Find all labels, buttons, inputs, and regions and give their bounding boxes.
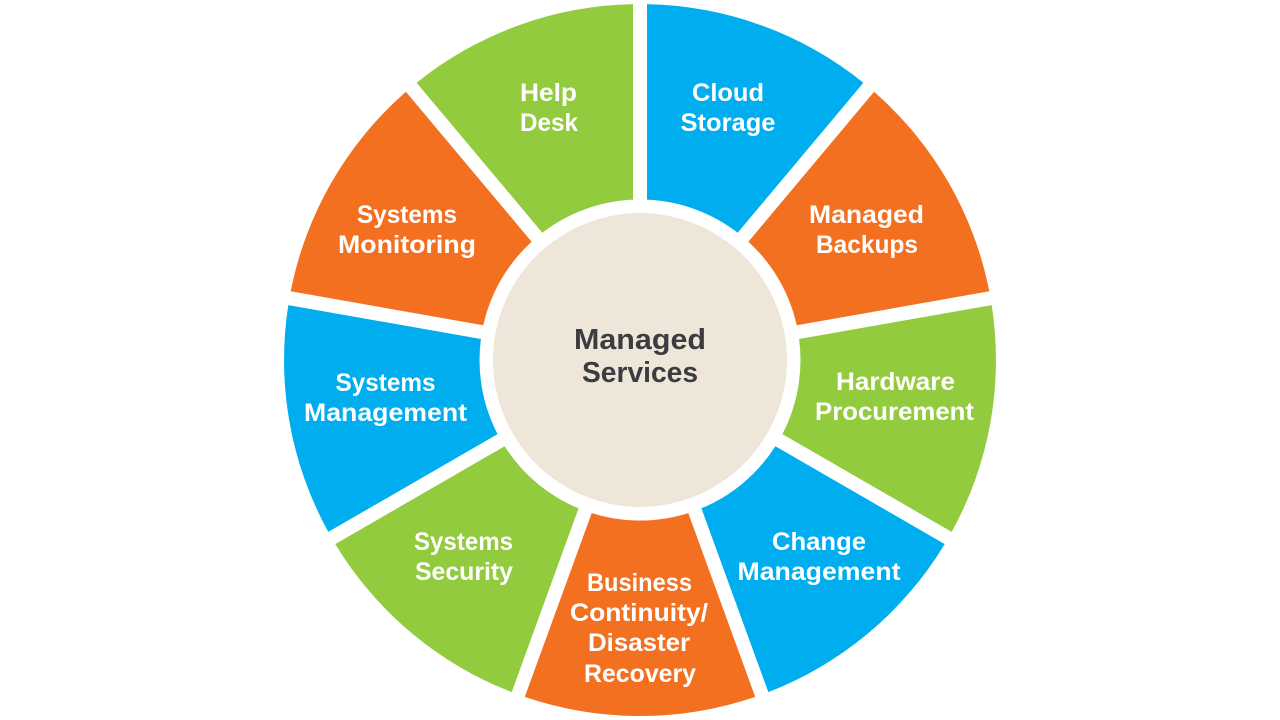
segment: Help Desk: Help <box>520 79 577 107</box>
segment: Business Continuity / Disaster Recovery <box>525 513 755 716</box>
segment: Managed Backups: Backups <box>816 231 918 259</box>
segment: Systems Management: Management <box>304 399 468 427</box>
segment: Cloud Storage: Cloud <box>692 79 764 107</box>
segment: Systems Monitoring <box>291 92 532 325</box>
segment: Help Desk <box>417 4 633 233</box>
segment: Systems Monitoring: Monitoring <box>338 231 476 259</box>
segment: Business Continuity / Disaster Recovery: Recovery <box>584 660 696 688</box>
segment: Hardware Procurement: Hardware <box>836 368 955 396</box>
segment: Managed Backups: Managed <box>809 201 924 229</box>
segment: Systems Security <box>335 446 579 692</box>
segment: Hardware Procurement: Procurement <box>815 398 975 426</box>
center hub: Managed Services <box>493 213 787 507</box>
segment: Change Management: Change <box>772 528 866 556</box>
center hub: Managed Services: Services <box>582 357 698 389</box>
segment: Hardware Procurement <box>782 305 996 532</box>
segment: Business Continuity / Disaster Recovery: Continuity/ <box>570 599 708 627</box>
segment: Systems Security: Systems <box>414 528 513 556</box>
segment: Systems Monitoring: Systems <box>357 201 457 229</box>
segment: Managed Backups <box>748 92 989 325</box>
segment: Change Management <box>701 446 945 692</box>
segment: Cloud Storage: Storage <box>680 109 776 137</box>
segment: Systems Management <box>284 305 498 532</box>
segment: Systems Management: Systems <box>336 369 436 397</box>
segment: Cloud Storage <box>647 4 863 233</box>
center hub: Managed Services: Managed <box>574 324 706 356</box>
segment: Change Management: Management <box>738 558 901 586</box>
segment: Help Desk: Desk <box>520 109 578 137</box>
segment: Systems Security: Security <box>415 558 513 586</box>
segment: Business Continuity / Disaster Recovery: Business <box>587 569 692 597</box>
segment: Business Continuity / Disaster Recovery: Disaster <box>588 629 690 657</box>
